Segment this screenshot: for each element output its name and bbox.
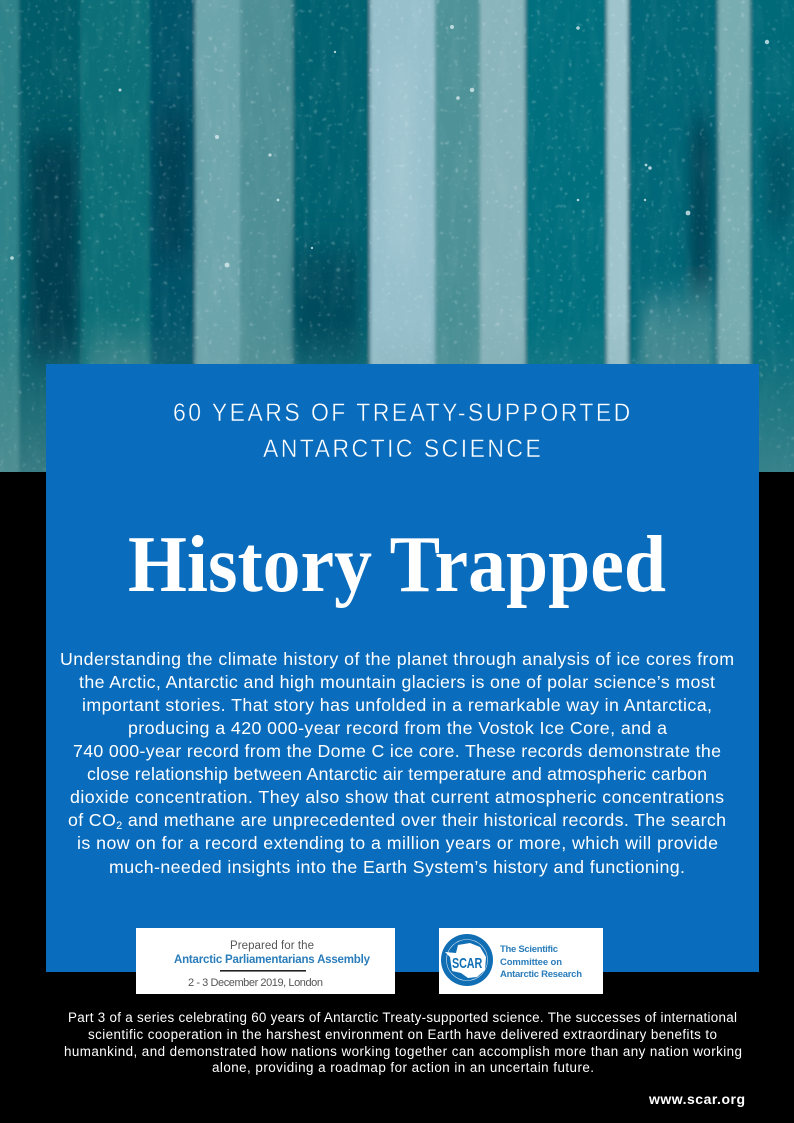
subtitle [173, 399, 630, 463]
icon: SCAR emblem: SCAR [452, 954, 483, 971]
body paragraph: close relationship between Antarctic air temperature and atmospheric carbon [87, 764, 707, 784]
logo card: prepared for: Prepared for the [230, 940, 314, 952]
logo card: prepared for: Antarctic Parliamentarians Assembly [174, 954, 371, 966]
body paragraph: is now on for a record extending to a million years or more, which will provide [77, 833, 718, 853]
SCAR name: The Scientific [500, 944, 558, 955]
logo card: prepared for [136, 928, 395, 994]
blue content panel [46, 364, 759, 972]
body paragraph: of CO [68, 810, 116, 830]
subtitle: ANTARCTIC SCIENCE [263, 435, 541, 463]
title: History Trapped [128, 519, 666, 609]
website: www.scar.org [648, 1091, 745, 1107]
body paragraph: the Arctic, Antarctic and high mountain glaciers is one of polar science’s most [79, 672, 715, 692]
body paragraph: producing a 420 000-year record from the Vostok Ice Core, and a [128, 718, 667, 738]
body paragraph: Understanding the climate history of the planet through analysis of ice cores from [60, 649, 734, 669]
footer description: Part 3 of a series celebrating 60 years of Antarctic Treaty-supported science. The successes of international [68, 1010, 737, 1025]
footer description: scientific cooperation in the harshest environment on Earth have delivered extraordinary benefits to [88, 1027, 717, 1042]
logo card: prepared for: 2 - 3 December 2019, London [188, 977, 323, 989]
footer description: humankind, and demonstrated how nations working together can accomplish more than any nation working [64, 1044, 742, 1059]
body paragraph: 2 [116, 820, 122, 832]
ice core photograph [0, 0, 794, 500]
SCAR name: Committee on [500, 957, 562, 968]
footer description: alone, providing a roadmap for action in an uncertain future. [212, 1060, 594, 1075]
logo card: SCAR [439, 928, 603, 994]
footer description [64, 1010, 742, 1075]
SCAR name [500, 944, 582, 980]
icon: SCAR emblem [441, 934, 493, 986]
body paragraph: and methane are unprecedented over their historical records. The search [123, 810, 726, 830]
body paragraph: important stories. That story has unfolded in a remarkable way in Antarctica, [82, 695, 712, 715]
SCAR name: Antarctic Research [500, 969, 582, 980]
body paragraph [60, 649, 734, 877]
body paragraph: 740 000-year record from the Dome C ice core. These records demonstrate the [73, 741, 721, 761]
body paragraph: dioxide concentration. They also show that current atmospheric concentrations [70, 787, 724, 807]
subtitle: 60 YEARS OF TREATY-SUPPORTED [173, 399, 630, 427]
body paragraph: much-needed insights into the Earth System’s history and functioning. [109, 857, 685, 877]
